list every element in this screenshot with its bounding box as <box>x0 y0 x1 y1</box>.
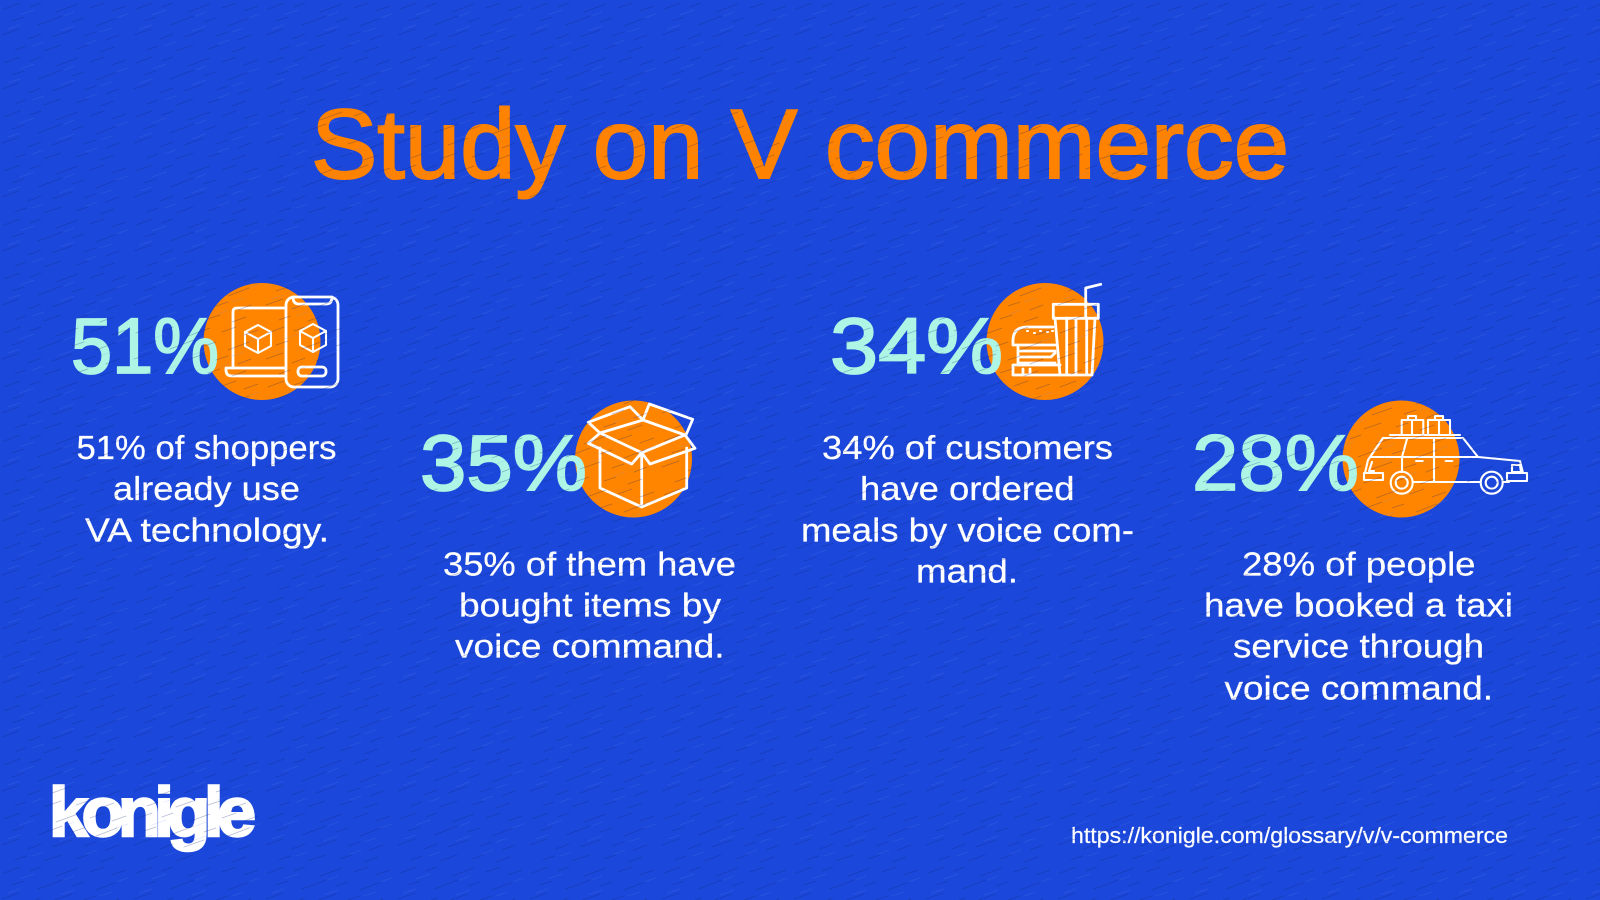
text: 35% description: voice command. <box>455 628 724 664</box>
text: 51% description: VA technology. <box>85 512 329 548</box>
panel: 51% shoppers <box>71 283 338 548</box>
source url: https://konigle.com/glossary/v/v-commerce <box>1071 823 1508 848</box>
text: 34% description: 34% of customers <box>822 429 1113 466</box>
orange circle 2 <box>575 400 692 518</box>
stat: 51%: 51% <box>71 301 219 390</box>
icon: laptop and phone with boxes <box>226 297 338 387</box>
title: Study on V commerce <box>311 89 1289 199</box>
icon: burger and drink <box>1013 284 1101 375</box>
text: 34% description: mand. <box>916 552 1018 590</box>
text: 51% description: 51% of shoppers <box>76 429 336 466</box>
text: 28% description: voice command. <box>1224 670 1493 706</box>
text: 34% description <box>801 429 1134 590</box>
orange circle 3 <box>986 283 1104 400</box>
orange circle 4 <box>1342 400 1460 518</box>
stat: 34%: 34% <box>830 301 1003 390</box>
text: 28% description: have booked a taxi <box>1204 586 1513 624</box>
panel: 28% booked taxi <box>1192 400 1527 706</box>
text: 51% description <box>76 429 336 548</box>
text: 51% description: already use <box>113 470 300 507</box>
text: 28% description: 28% of people <box>1242 546 1476 582</box>
text: 35% description <box>443 546 736 664</box>
panel: 35% bought items <box>420 400 736 664</box>
panel: 34% ordered meals <box>801 283 1134 590</box>
stat: 28%: 28% <box>1192 418 1359 507</box>
icon: car with luggage <box>1364 416 1527 494</box>
icon: open box <box>588 404 695 507</box>
text: 35% description: 35% of them have <box>443 546 736 582</box>
orange circle 1 <box>204 283 320 400</box>
text: 35% description: bought items by <box>459 586 722 624</box>
logo: konigle: konigle <box>49 773 256 851</box>
text: 28% description: service through <box>1233 628 1484 664</box>
text: 28% description <box>1204 546 1513 706</box>
text: 34% description: have ordered <box>860 470 1074 507</box>
text: 34% description: meals by voice com- <box>801 512 1134 548</box>
stat: 35%: 35% <box>420 418 587 507</box>
